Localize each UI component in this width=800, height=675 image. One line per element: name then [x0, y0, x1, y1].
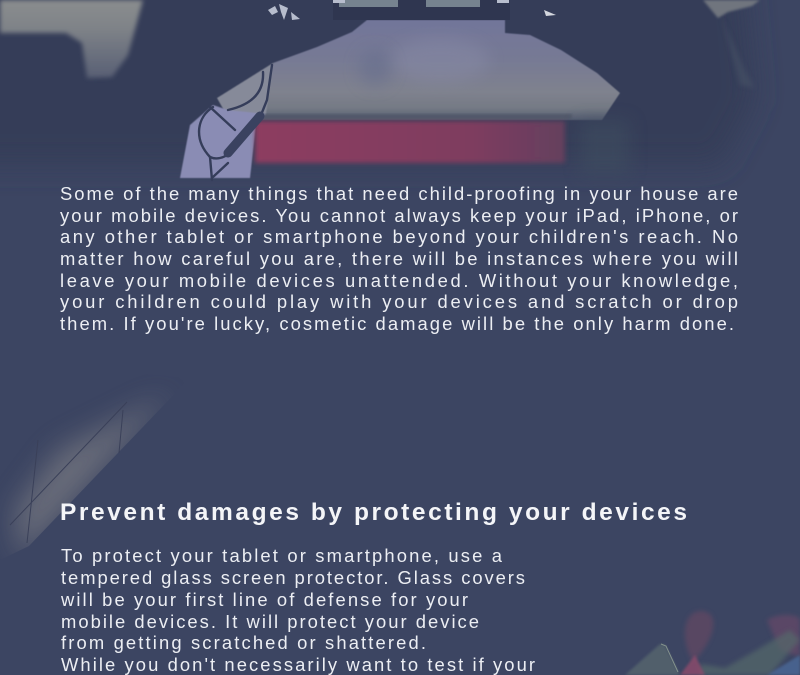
intro paragraph: your mobile devices. You cannot always keep your iPad, iPhone, or — [60, 205, 738, 226]
intro paragraph: matter how careful you are, there will be instances where you will — [60, 248, 738, 269]
cables — [199, 65, 272, 180]
darker cloudy stain in arch — [359, 50, 391, 86]
shard crack lines — [10, 402, 127, 543]
red stripe — [255, 121, 565, 163]
green tint right of stripe — [580, 120, 630, 175]
cable connector — [228, 116, 260, 153]
body paragraph: To protect your tablet or smartphone, use a — [61, 545, 503, 566]
dark silhouette tone — [0, 0, 755, 165]
body paragraph: from getting scratched or shattered. — [61, 632, 426, 653]
intro paragraph: them. If you're lucky, cosmetic damage will be the only harm done. — [60, 313, 734, 334]
lilac cable panel — [180, 105, 266, 178]
hair highlight: top right — [703, 0, 760, 18]
intro paragraph — [60, 183, 738, 334]
intro paragraph: any other tablet or smartphone beyond your children's reach. No — [60, 226, 738, 247]
body paragraph: tempered glass screen protector. Glass covers — [61, 567, 525, 588]
body paragraph: While you don't necessarily want to test if your — [61, 654, 535, 675]
colourful light wave: bottom right — [625, 611, 800, 675]
section heading: Prevent damages by protecting your devices — [60, 499, 687, 526]
body paragraph: mobile devices. It will protect your device — [61, 611, 479, 632]
body paragraph: will be your first line of defense for your — [60, 589, 468, 610]
cloudy highlight in arch — [390, 38, 490, 82]
arch of light between the arms — [250, 20, 620, 120]
body paragraph — [60, 545, 535, 675]
intro paragraph: your children could play with your devices and scratch or drop — [60, 291, 738, 312]
dark band above the stripe — [262, 114, 572, 119]
left part of arch behind cables — [217, 63, 273, 130]
phone in hands — [333, 0, 510, 20]
decorative glass shard: left — [6, 402, 156, 552]
intro paragraph: Some of the many things that need child-proofing in your house are — [60, 183, 738, 204]
finger glints — [268, 4, 300, 20]
photo background: silhouette of person holding device — [0, 0, 760, 180]
faint right edge sheen — [722, 18, 755, 88]
intro paragraph: leave your mobile devices unattended. Without your knowledge, — [60, 270, 738, 291]
hair highlight: top left — [0, 0, 143, 78]
